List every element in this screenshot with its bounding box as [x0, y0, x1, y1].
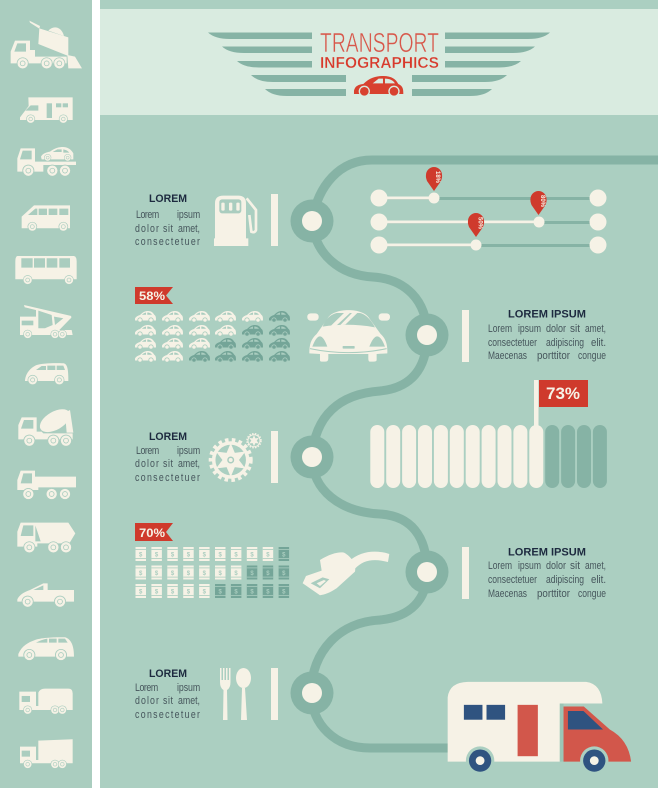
icon: fork and spoon — [220, 668, 251, 720]
text block: food — [135, 668, 201, 721]
badge: 58% — [135, 287, 173, 304]
text block: fuel price: ipsum — [518, 560, 541, 572]
route node 2 — [406, 314, 448, 356]
panel: header — [100, 9, 658, 115]
icon: crane truck — [20, 305, 73, 339]
text block: fuel price: Lorem — [488, 560, 512, 572]
map pin 3: 50% — [476, 217, 482, 230]
title: infographics: INFOGRAPHICS — [320, 55, 439, 72]
map pin 2 — [530, 191, 547, 215]
text block: fuel: consectetuer — [135, 236, 201, 248]
text block: maintenance: ipsum — [177, 445, 200, 457]
text block: fuel: sit — [163, 223, 173, 235]
flag: 73% — [534, 380, 588, 426]
text block: fuel price: consectetuer — [488, 574, 537, 586]
text block: car: consectetuer — [488, 337, 537, 349]
map pin 1: 18% — [434, 171, 440, 184]
text block: food: ipsum — [177, 682, 200, 694]
text block: maintenance — [135, 431, 201, 484]
icon: box truck — [20, 739, 73, 769]
text block: maintenance: dolor — [135, 458, 160, 470]
icon: gas pump — [214, 196, 256, 246]
text block: fuel: dolor — [135, 223, 160, 235]
route node 4 — [406, 550, 448, 594]
text block: food: Lorem — [135, 682, 158, 694]
text block: car: Maecenas — [488, 350, 527, 362]
icon: bus — [15, 256, 77, 285]
slider row 3 — [370, 236, 606, 254]
money pictogram chart — [136, 547, 289, 598]
icon: tow truck — [17, 147, 76, 177]
icon: flatbed truck — [17, 471, 76, 500]
text block: maintenance: amet, — [178, 458, 200, 470]
text block: car: ipsum — [518, 323, 541, 335]
slider row 2 — [370, 214, 606, 230]
text block: fuel price: LOREM IPSUM — [508, 546, 586, 558]
text block: car: LOREM IPSUM — [508, 308, 586, 320]
flag: 73%: 73% — [546, 384, 580, 403]
icon: station wagon — [18, 637, 74, 661]
icon: fuel nozzle — [303, 552, 389, 595]
icon: cement mixer — [18, 405, 74, 447]
icon: tanker truck — [19, 689, 73, 714]
wings: left — [208, 32, 346, 96]
divider bar 4 — [462, 547, 469, 599]
route node 1 — [290, 200, 334, 242]
text block: car: dolor — [546, 323, 566, 335]
text block: car: amet, — [585, 323, 606, 335]
text block: fuel price: amet, — [585, 560, 606, 572]
divider bar 2 — [462, 310, 469, 362]
icon: camper van — [20, 97, 73, 123]
divider bar 5 — [271, 668, 278, 720]
map pin 3 — [468, 213, 484, 237]
route node 3 — [290, 436, 334, 478]
slider chart — [370, 167, 606, 254]
badge: 70%: 70% — [139, 526, 165, 540]
text block: fuel price: dolor — [546, 560, 566, 572]
divider bar 3 — [271, 431, 278, 483]
route road — [311, 160, 658, 748]
icon: dump truck — [11, 21, 82, 69]
text block: fuel price: elit. — [591, 574, 606, 586]
text block: food: sit — [163, 695, 173, 707]
title: transport: TRANSPORT — [320, 27, 439, 58]
text block: fuel price: Maecenas — [488, 588, 527, 600]
text block: car — [488, 308, 606, 362]
icon: car front — [307, 310, 390, 362]
text block: fuel price: sit — [570, 560, 580, 572]
text block: fuel price — [488, 546, 606, 600]
text block: car: porttitor — [537, 350, 570, 362]
text block: car: congue — [578, 350, 606, 362]
text block: fuel: amet, — [178, 223, 200, 235]
text block: fuel: ipsum — [177, 209, 200, 221]
panel: vehicle sidebar — [0, 0, 92, 788]
text block: maintenance: sit — [163, 458, 173, 470]
slider row 1 — [370, 190, 606, 206]
text block: fuel: Lorem — [136, 209, 159, 221]
text block: fuel price: adipiscing — [546, 574, 584, 586]
percentage bars chart — [370, 380, 607, 488]
text block: car: Lorem — [488, 323, 512, 335]
route node 5 — [290, 672, 334, 714]
map pin 2: 80% — [539, 195, 545, 208]
badge: 70% — [135, 523, 173, 541]
text block: maintenance: LOREM — [149, 431, 187, 443]
icon: red car — [354, 76, 403, 97]
icon: pickup — [17, 583, 74, 608]
text block: car: adipiscing — [546, 337, 584, 349]
icon: tipper truck — [17, 523, 75, 553]
text block: fuel price: porttitor — [537, 588, 570, 600]
text block: fuel: LOREM — [149, 193, 187, 205]
wings: right — [412, 32, 550, 96]
icon: minivan — [25, 363, 68, 385]
text block: fuel — [135, 193, 201, 248]
text block: car: elit. — [591, 337, 606, 349]
icon: camper van large — [448, 682, 631, 775]
text block: food: LOREM — [149, 668, 187, 680]
car pictogram chart — [135, 311, 290, 363]
text block: fuel price: congue — [578, 588, 606, 600]
divider bar 1 — [271, 194, 278, 246]
text block: car: sit — [570, 323, 580, 335]
map pin 1 — [426, 167, 442, 191]
icon: gears — [211, 434, 261, 480]
text block: food: dolor — [135, 695, 160, 707]
text block: food: consectetuer — [135, 709, 201, 721]
text block: maintenance: consectetuer — [135, 472, 201, 484]
text block: maintenance: Lorem — [136, 445, 159, 457]
badge: 58%: 58% — [139, 289, 165, 303]
icon: van — [22, 205, 70, 231]
text block: food: amet, — [178, 695, 200, 707]
